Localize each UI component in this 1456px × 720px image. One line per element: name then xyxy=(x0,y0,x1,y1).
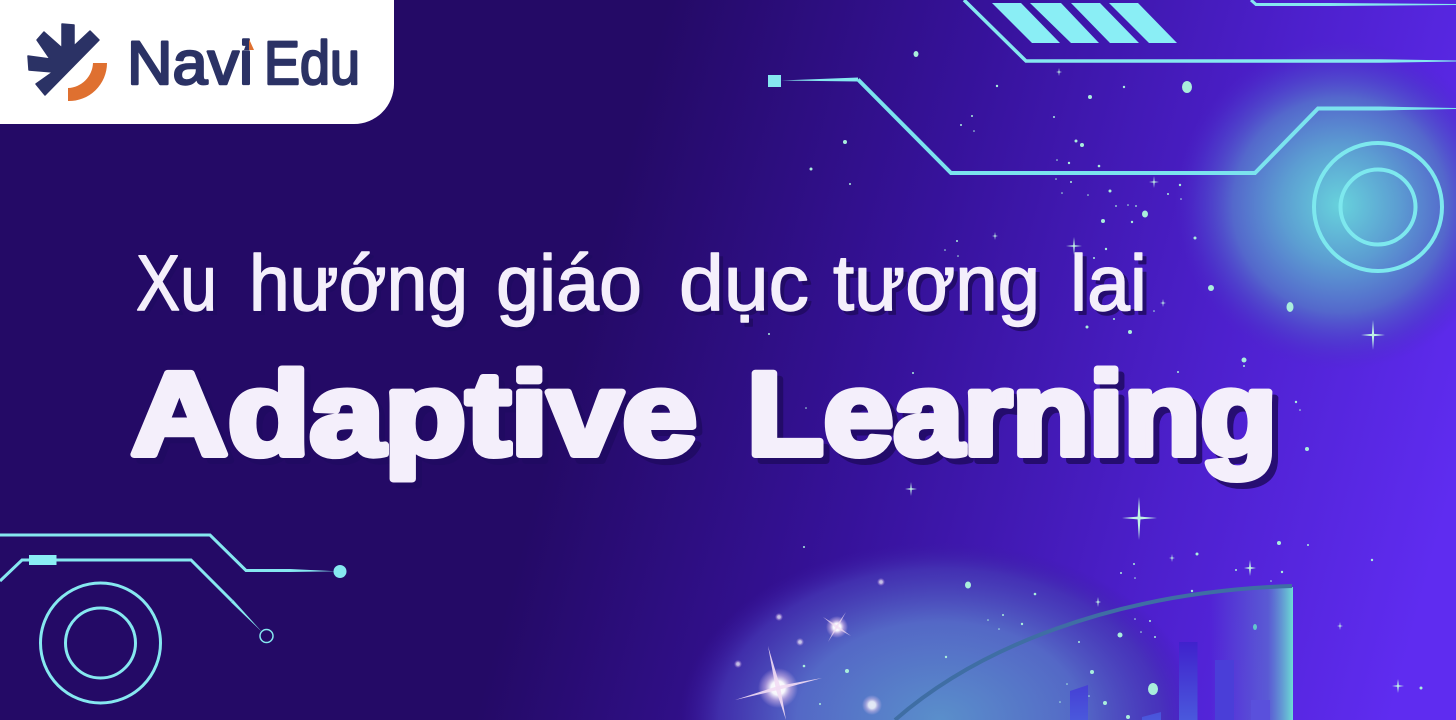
bottom left concentric circles xyxy=(40,583,160,703)
star crosses xyxy=(905,68,1404,693)
right concentric circles xyxy=(1314,143,1442,271)
heading line: Xu hướng giáo dục tương lai: Xu xyxy=(136,238,217,327)
icon: NaviEdu sunburst xyxy=(28,24,107,101)
logo wordmark: Navi xyxy=(127,29,253,97)
logo panel xyxy=(0,0,394,124)
bottom glow xyxy=(680,542,1200,720)
star dots xyxy=(768,51,1422,719)
heading line: Xu hướng giáo dục tương lai xyxy=(136,238,1147,327)
heading line: Adaptive Learning: Learning xyxy=(747,348,1277,480)
heading line: Adaptive Learning: Adaptive xyxy=(131,348,697,480)
heading line: Adaptive Learning xyxy=(131,348,1277,480)
heading line: Xu hướng giáo dục tương lai: tương xyxy=(833,238,1040,327)
heading line: Xu hướng giáo dục tương lai: giáo xyxy=(496,238,642,327)
middle circuit line with square terminal xyxy=(768,75,1456,173)
heading line: Xu hướng giáo dục tương lai: hướng xyxy=(249,238,468,327)
heading line: Xu hướng giáo dục tương lai: lai xyxy=(1070,238,1147,327)
top circuit with stripes xyxy=(964,0,1456,63)
bright sparkles xyxy=(734,578,885,720)
logo wordmark: Edu xyxy=(264,29,360,97)
top right glow xyxy=(1175,40,1456,370)
heading line: Xu hướng giáo dục tương lai: dục xyxy=(679,238,809,327)
logo wordmark xyxy=(127,29,360,97)
bar chart xyxy=(1070,642,1270,720)
bottom left circuit lines xyxy=(0,535,346,642)
glass panel with bar chart xyxy=(895,586,1293,720)
